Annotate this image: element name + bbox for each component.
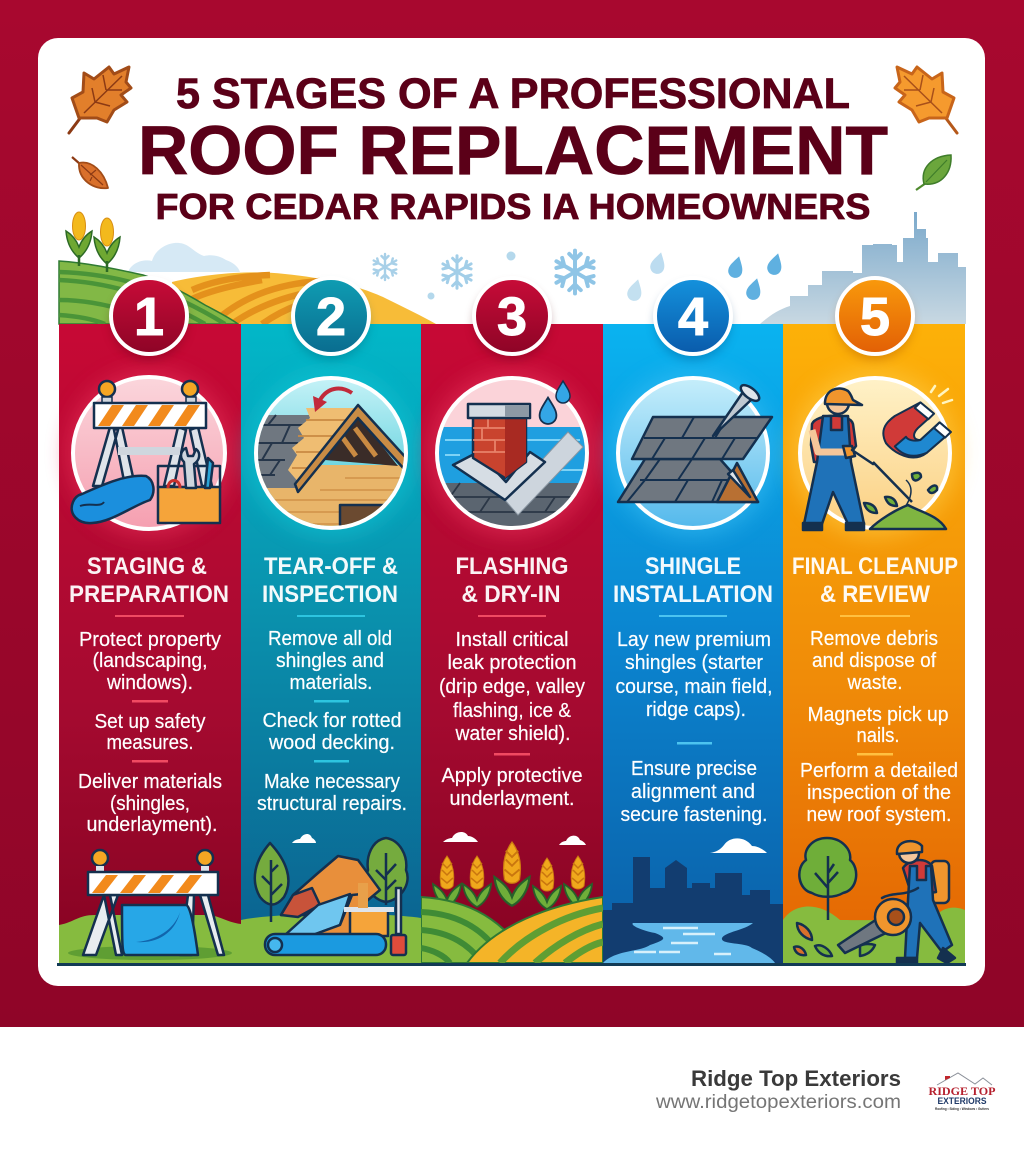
body text stage 2: materials.: [290, 672, 372, 694]
icon: green leaf: [916, 155, 951, 190]
body text stage 3: flashing, ice &: [453, 700, 572, 722]
landscape strip above the columns: [59, 243, 436, 324]
number badge 1: 1: [134, 287, 164, 347]
icon: snowflake two: [441, 256, 473, 288]
body text stage 2: wood decking.: [268, 732, 395, 754]
number badge 5: [837, 278, 913, 360]
panel: stage 1 staging and preparation: [59, 278, 241, 963]
icon: corn stalk right: [94, 218, 120, 272]
body text stage 4: [616, 629, 772, 826]
icon 3: chimney flashing: [437, 378, 588, 535]
body text stage 2: structural repairs.: [257, 793, 407, 815]
body text stage 2: Remove all old: [268, 628, 392, 650]
icon 4: shingles and nails: [618, 378, 772, 528]
scene: trees, tear-off debris and roller: [241, 834, 421, 963]
number badge 3: [474, 278, 550, 360]
body text stage 3: leak protection: [448, 652, 576, 674]
glow behind icon 2: [247, 369, 415, 537]
body text stage 1: underlayment).: [86, 814, 218, 836]
body text stage 4: Lay new premium: [617, 629, 771, 651]
footer brand name and website: [655, 1066, 901, 1113]
title: FOR CEDAR RAPIDS IA HOMEOWNERS: [156, 186, 870, 227]
body text stage 4: secure fastening.: [620, 804, 768, 826]
number badge 3: 3: [497, 287, 527, 347]
panel: stage 3 flashing and dry-in: [421, 278, 603, 963]
body text stage 3: water shield).: [455, 723, 570, 745]
body text stage 2: shingles and: [276, 650, 384, 672]
icon: corn stalk left: [66, 212, 92, 266]
number badge 5: 5: [860, 287, 890, 347]
body text stage 5: Perform a detailed: [800, 760, 958, 782]
icon 1: barricade, tarp and toolbox: [72, 377, 225, 529]
glow behind icon 5: [791, 369, 959, 537]
heading: staging and preparation: STAGING &: [87, 553, 207, 580]
icon: snow dot: [506, 252, 516, 260]
body text stage 3: Install critical: [456, 629, 568, 651]
pale cloud behind fields: [128, 243, 240, 272]
body text stage 3: underlayment.: [450, 788, 574, 810]
body text stage 5: new roof system.: [806, 804, 952, 826]
body text stage 1: Deliver materials: [78, 771, 222, 793]
heading: tear-off and inspection: TEAR-OFF &: [264, 553, 398, 580]
panel: stage 5 final cleanup and review: [783, 278, 965, 963]
body text stage 1: [78, 629, 222, 836]
icon: snowflake one: [372, 254, 398, 280]
body text stage 2: [257, 628, 407, 815]
footer logo: RIDGE TOP: [928, 1084, 996, 1098]
body text stage 4: course, main field,: [616, 676, 772, 698]
body text stage 1: measures.: [106, 732, 194, 754]
icon: snowflake three: [554, 251, 596, 293]
glow behind icon 1: [66, 369, 234, 537]
icon: small brown leaf: [72, 157, 108, 188]
heading: staging and preparation: [69, 553, 229, 608]
body text stage 1: Set up safety: [94, 711, 206, 733]
green field hill: [59, 261, 238, 324]
body text stage 5: Remove debris: [810, 628, 938, 650]
heading: final cleanup and review: FINAL CLEANUP: [792, 553, 958, 580]
city skyline silhouette: [760, 212, 966, 324]
scene: wheat and striped fields: [421, 832, 603, 963]
footer brand name and website: Ridge Top Exteriors: [691, 1066, 901, 1091]
body text stage 4: alignment and: [631, 781, 755, 803]
footer logo: [928, 1073, 996, 1111]
panel: stage 4 shingle installation: [603, 278, 783, 963]
number badge 2: [293, 278, 369, 360]
footer brand name and website: www.ridgetopexteriors.com: [655, 1092, 901, 1113]
body text stage 4: ridge caps).: [646, 699, 746, 721]
glow behind icon 3: [428, 369, 596, 537]
heading: flashing and dry-in: [456, 553, 568, 608]
body text stage 5: waste.: [847, 672, 902, 694]
body text stage 1: windows).: [106, 672, 193, 694]
heading: shingle installation: SHINGLE: [645, 553, 741, 580]
body text stage 2: Make necessary: [264, 771, 400, 793]
body text stage 1: (landscaping,: [92, 650, 208, 672]
footer logo: Roofing • Siding • Windows • Gutters: [935, 1106, 990, 1111]
icon 2: roof being stripped: [255, 378, 410, 535]
scene: city skyline and river: [603, 838, 783, 963]
heading: final cleanup and review: [792, 553, 958, 608]
body text stage 1: Protect property: [79, 629, 221, 651]
icon 5: worker, rake, magnet and debris: [800, 378, 952, 530]
body text stage 3: (drip edge, valley: [439, 676, 585, 698]
golden field hill: [172, 272, 436, 324]
body text stage 4: shingles (starter: [625, 652, 763, 674]
baseline under the columns: [57, 963, 966, 966]
number badge 2: 2: [316, 287, 346, 347]
body text stage 5: nails.: [856, 725, 900, 747]
number badge 4: 4: [678, 287, 708, 347]
heading: tear-off and inspection: [262, 553, 398, 608]
body text stage 3: [439, 629, 585, 810]
heading: shingle installation: INSTALLATION: [613, 581, 773, 608]
icon: rain drops: [626, 251, 785, 302]
body text stage 3: Apply protective: [442, 765, 582, 787]
scene: barricade with tarp on grass: [59, 850, 241, 963]
number badge 4: [655, 278, 731, 360]
body text stage 4: Ensure precise: [631, 758, 757, 780]
body text stage 1: (shingles,: [110, 793, 190, 815]
scene: tree, worker with leaf blower on grass: [783, 838, 965, 963]
body text stage 2: Check for rotted: [262, 710, 402, 732]
icon: orange oak leaf top right: [895, 67, 957, 133]
icon: snow dot small: [428, 292, 434, 300]
title: 5 STAGES OF A PROFESSIONAL: [176, 70, 850, 118]
white footer strip: [0, 1027, 1024, 1154]
body text stage 5: Magnets pick up: [808, 704, 948, 726]
heading: shingle installation: [613, 553, 773, 608]
heading: staging and preparation: PREPARATION: [69, 581, 229, 608]
heading: tear-off and inspection: INSPECTION: [262, 581, 398, 608]
title: [138, 70, 888, 227]
main white card: [38, 38, 985, 986]
panel: stage 2 tear-off and inspection: [241, 278, 421, 963]
body text stage 5: inspection of the: [807, 782, 951, 804]
heading: final cleanup and review: & REVIEW: [820, 581, 930, 608]
heading: flashing and dry-in: FLASHING: [456, 553, 568, 580]
icon: orange oak leaf top left: [69, 67, 131, 133]
footer logo: EXTERIORS: [938, 1096, 986, 1106]
number badge 1: [111, 278, 187, 360]
body text stage 5: and dispose of: [812, 650, 936, 672]
glow behind icon 4: [609, 369, 777, 537]
body text stage 5: [800, 628, 958, 826]
heading: flashing and dry-in: & DRY-IN: [462, 581, 560, 608]
title: ROOF REPLACEMENT: [138, 112, 888, 189]
